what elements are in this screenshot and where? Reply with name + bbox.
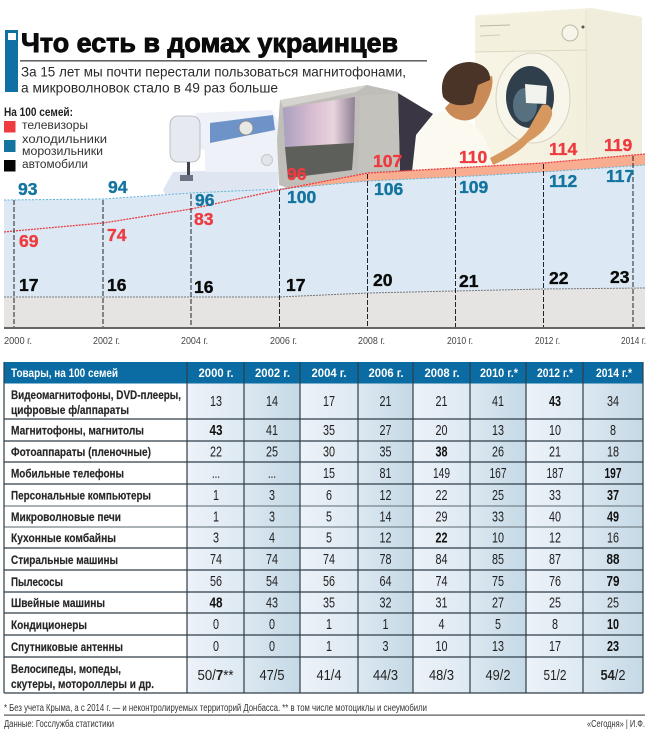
area: televisions band <box>279 154 645 189</box>
table header: 2000 г. <box>198 368 234 380</box>
row: vacuum cleaners: Пылесосы <box>11 575 63 589</box>
row: film cameras <box>11 444 619 460</box>
table header: 2010 г.* <box>480 368 518 380</box>
row: food processors: Кухонные комбайны <box>11 531 116 545</box>
car values: 22 <box>549 268 569 288</box>
row: sewing machines: 25 <box>549 596 561 612</box>
row: microwaves: 33 <box>492 510 504 526</box>
row: satellite dishes: Спутниковые антенны <box>11 640 123 654</box>
column backgrounds <box>187 383 643 693</box>
row: video recorders: 43 <box>549 394 561 410</box>
row: vacuum cleaners: 64 <box>380 574 392 590</box>
row: satellite dishes: 17 <box>549 639 561 655</box>
footnote: * Без учета Крыма, а с 2014 г. — и неконтролируемых территорий Донбасса. ** в том числе мотоциклы и снеумобили <box>4 702 427 714</box>
row: tape recorders: 10 <box>549 423 561 439</box>
television values: 110 <box>459 147 487 167</box>
line chart <box>4 135 646 347</box>
legend: телевизоры <box>22 120 88 132</box>
row: air conditioners: 1 <box>382 617 388 633</box>
row: vacuum cleaners: 74 <box>436 574 448 590</box>
row: mobile phones: 149 <box>433 466 450 482</box>
row: food processors <box>11 530 619 546</box>
axis <box>4 327 645 329</box>
row: tape recorders: 41 <box>266 423 278 439</box>
row: mobile phones: ... <box>268 466 276 482</box>
row: vacuum cleaners: 79 <box>606 574 620 590</box>
row: tape recorders: 8 <box>610 423 616 439</box>
row: washing machines: 78 <box>380 552 392 568</box>
row: food processors: 12 <box>380 530 392 546</box>
row: tape recorders: 13 <box>492 423 504 439</box>
blue panel <box>210 115 275 143</box>
row: vacuum cleaners <box>11 574 620 590</box>
row: film cameras: Фотоаппараты (пленочные) <box>11 445 151 459</box>
row: bicycles and mopeds: Велосипеды, мопеды, <box>11 662 121 676</box>
refrigerator values: 100 <box>287 187 316 207</box>
subtitle first line: За 15 лет мы почти перестали пользоваться магнитофонами, <box>21 64 406 80</box>
dials <box>239 121 272 166</box>
row: satellite dishes: 23 <box>607 639 619 655</box>
row: washing machines: 74 <box>323 552 335 568</box>
row: bicycles and mopeds: скутеры, мотороллеры и др. <box>11 677 154 691</box>
row: tape recorders: 20 <box>436 423 448 439</box>
row: washing machines: 74 <box>210 552 222 568</box>
subtitle second line: а микроволновок стало в 49 раз больше <box>21 80 278 96</box>
car values: 16 <box>194 277 214 297</box>
refrigerator values: 93 <box>18 179 38 199</box>
row: personal computers: 12 <box>380 488 392 504</box>
table header: 2014 г.* <box>596 368 632 380</box>
year labels: 2012 г. <box>535 335 560 347</box>
row: air conditioners: 1 <box>326 617 332 633</box>
row: air conditioners: 0 <box>213 617 219 633</box>
row: video recorders: 14 <box>266 394 278 410</box>
row: tape recorders: Магнитофоны, магнитолы <box>11 424 144 438</box>
row: mobile phones: Мобильные телефоны <box>11 466 124 480</box>
car values: 20 <box>373 270 393 290</box>
row: food processors: 22 <box>436 530 448 546</box>
row: film cameras: 22 <box>210 444 222 460</box>
row: satellite dishes: 0 <box>269 639 275 655</box>
year labels: 2008 г. <box>358 335 385 347</box>
year labels: 2006 г. <box>270 335 297 347</box>
row: microwaves: 40 <box>549 510 561 526</box>
row: air conditioners: 10 <box>607 617 619 633</box>
row: video recorders: 17 <box>323 394 335 410</box>
footer rule <box>4 714 645 716</box>
refrigerator values: 94 <box>108 177 128 197</box>
row: satellite dishes: 0 <box>213 639 219 655</box>
row: food processors: 4 <box>269 530 275 546</box>
row: video recorders: цифровые ф/аппараты <box>11 403 129 417</box>
table header <box>4 362 643 384</box>
television values: 74 <box>107 225 127 245</box>
row: food processors: 5 <box>326 530 332 546</box>
row: sewing machines: Швейные машины <box>11 596 105 610</box>
row: bicycles and mopeds: 44/3 <box>373 668 398 684</box>
row: bicycles and mopeds: 48/3 <box>429 668 454 684</box>
row: mobile phones: 187 <box>546 466 564 482</box>
row: washing machines: 74 <box>266 552 278 568</box>
row: microwaves: 29 <box>436 510 448 526</box>
row: food processors: 3 <box>213 530 219 546</box>
area: cars <box>4 288 645 328</box>
row: microwaves: Микроволновые печи <box>11 510 121 524</box>
row: microwaves: 5 <box>326 510 332 526</box>
row: sewing machines: 35 <box>323 596 335 612</box>
row: vacuum cleaners: 56 <box>210 574 222 590</box>
row: mobile phones: 15 <box>323 466 335 482</box>
row: mobile phones: 167 <box>490 466 506 482</box>
row: sewing machines: 48 <box>210 596 222 612</box>
row: sewing machines <box>11 596 619 612</box>
television values: 107 <box>373 151 402 171</box>
table grid <box>4 362 643 693</box>
row: video recorders <box>11 388 619 417</box>
title: Что есть в домах украинцев <box>21 28 398 58</box>
row: bicycles and mopeds: 41/4 <box>316 668 342 684</box>
year labels: 2000 г. <box>4 335 32 347</box>
row: sewing machines: 32 <box>380 596 392 612</box>
line: cars <box>4 288 645 297</box>
row: video recorders: 21 <box>380 394 392 410</box>
row: personal computers: 33 <box>549 488 561 504</box>
row: washing machines: 88 <box>606 552 620 568</box>
row: microwaves <box>11 510 619 526</box>
row: microwaves: 14 <box>380 510 392 526</box>
row: air conditioners: 0 <box>269 617 275 633</box>
row: tape recorders <box>11 423 616 439</box>
sewing machine photo <box>163 110 278 194</box>
year labels: 2004 г. <box>181 335 208 347</box>
table header: 2006 г. <box>368 368 404 380</box>
row: bicycles and mopeds: 47/5 <box>260 668 284 684</box>
row: bicycles and mopeds: 51/2 <box>544 668 566 684</box>
row: film cameras: 21 <box>549 444 561 460</box>
row: video recorders: 41 <box>492 394 504 410</box>
table header: 2002 г. <box>255 368 290 380</box>
machine head <box>170 116 200 162</box>
car values <box>19 267 630 297</box>
row: washing machines <box>11 552 620 568</box>
refrigerator values: 96 <box>195 190 215 210</box>
row: video recorders: Видеомагнитофоны, DVD-плееры, <box>11 388 181 402</box>
row: personal computers: 3 <box>269 488 275 504</box>
refrigerator values: 109 <box>459 177 488 197</box>
row: vacuum cleaners: 56 <box>323 574 335 590</box>
row: film cameras: 26 <box>492 444 504 460</box>
row: microwaves: 3 <box>269 510 275 526</box>
refrigerator values <box>18 166 634 210</box>
row: sewing machines: 43 <box>266 596 278 612</box>
row: film cameras: 25 <box>266 444 278 460</box>
legend <box>4 107 107 172</box>
row: film cameras: 35 <box>380 444 392 460</box>
row: sewing machines: 27 <box>492 596 504 612</box>
row: video recorders: 13 <box>210 394 222 410</box>
row: tape recorders: 43 <box>210 423 222 439</box>
legend: морозильники <box>22 146 103 158</box>
year gridlines <box>14 156 633 328</box>
year labels: 2002 г. <box>93 335 120 347</box>
television values: 114 <box>549 139 577 159</box>
row: air conditioners: Кондиционеры <box>11 618 87 632</box>
year labels <box>4 335 646 347</box>
area: refrigerators <box>4 165 645 328</box>
year labels: 2010 г. <box>447 335 473 347</box>
row: satellite dishes: 13 <box>492 639 504 655</box>
row: film cameras: 18 <box>607 444 619 460</box>
refrigerator values: 112 <box>549 171 577 191</box>
row: video recorders: 34 <box>607 394 619 410</box>
needle and foot <box>180 162 193 181</box>
row: personal computers: 37 <box>607 488 619 504</box>
washing machine photo <box>475 8 642 170</box>
legend: холодильники <box>22 134 107 146</box>
row: air conditioners: 5 <box>495 617 501 633</box>
row: washing machines: 85 <box>492 552 504 568</box>
row: vacuum cleaners: 75 <box>492 574 504 590</box>
machine arm <box>196 110 278 172</box>
television values: 69 <box>19 231 39 251</box>
legend: На 100 семей: <box>4 107 73 119</box>
row: bicycles and mopeds: 49/2 <box>486 668 510 684</box>
refrigerator values: 117 <box>606 166 634 186</box>
row: air conditioners <box>11 617 619 633</box>
source: Данные: Госслужба статистики <box>4 718 114 730</box>
row: satellite dishes: 3 <box>382 639 388 655</box>
row: food processors: 12 <box>549 530 561 546</box>
row: bicycles and mopeds: 54/2 <box>600 668 626 684</box>
row: sewing machines: 25 <box>607 596 619 612</box>
television values: 96 <box>287 164 307 184</box>
row: personal computers: 6 <box>326 488 332 504</box>
data table <box>4 362 643 693</box>
television values <box>19 135 632 251</box>
row: personal computers: 22 <box>436 488 448 504</box>
row: mobile phones: 81 <box>380 466 392 482</box>
row: vacuum cleaners: 76 <box>549 574 561 590</box>
row: personal computers: 25 <box>492 488 504 504</box>
TV photo <box>277 85 433 189</box>
row: personal computers <box>11 488 619 504</box>
row: air conditioners: 8 <box>552 617 558 633</box>
machine bed <box>163 168 278 194</box>
row: satellite dishes: 10 <box>436 639 448 655</box>
table header: 2008 г. <box>424 368 460 380</box>
television values: 119 <box>604 135 632 155</box>
row: mobile phones: ... <box>212 466 220 482</box>
refrigerator values: 106 <box>374 179 403 199</box>
row: film cameras: 38 <box>436 444 448 460</box>
row: video recorders: 21 <box>436 394 448 410</box>
row: tape recorders: 35 <box>323 423 335 439</box>
row: washing machines: 87 <box>549 552 561 568</box>
car values: 16 <box>107 275 127 295</box>
table header: 2004 г. <box>312 368 346 380</box>
row: personal computers: 1 <box>213 488 219 504</box>
title block <box>5 28 427 92</box>
line: televisions <box>4 154 645 232</box>
row: mobile phones: 197 <box>604 466 622 482</box>
row: tape recorders: 27 <box>380 423 392 439</box>
row: bicycles and mopeds <box>11 662 626 691</box>
car values: 23 <box>610 267 630 287</box>
car values: 21 <box>459 271 479 291</box>
row: microwaves: 49 <box>607 510 619 526</box>
year labels: 2014 г. <box>621 335 646 347</box>
man photo <box>411 62 552 171</box>
row: washing machines: Стиральные машины <box>11 553 118 567</box>
row: food processors: 10 <box>492 530 504 546</box>
row: washing machines: 84 <box>436 552 448 568</box>
table header: Товары, на 100 семей <box>11 368 118 380</box>
row: air conditioners: 4 <box>438 617 444 633</box>
table header: 2012 г.* <box>537 368 573 380</box>
row: bicycles and mopeds: 50/7** <box>198 668 234 684</box>
row: sewing machines: 31 <box>436 596 448 612</box>
row: food processors: 16 <box>607 530 619 546</box>
car values: 17 <box>19 275 38 295</box>
line: refrigerators <box>4 165 645 200</box>
title marker <box>5 30 18 92</box>
legend: автомобили <box>22 159 88 171</box>
row: microwaves: 1 <box>213 510 219 526</box>
row: satellite dishes <box>11 639 619 655</box>
row: satellite dishes: 1 <box>326 639 332 655</box>
row: vacuum cleaners: 54 <box>266 574 278 590</box>
row: personal computers: Персональные компьютеры <box>11 488 151 502</box>
row: mobile phones <box>11 466 622 482</box>
television values: 83 <box>194 209 214 229</box>
car values: 17 <box>286 275 305 295</box>
row: film cameras: 30 <box>323 444 335 460</box>
